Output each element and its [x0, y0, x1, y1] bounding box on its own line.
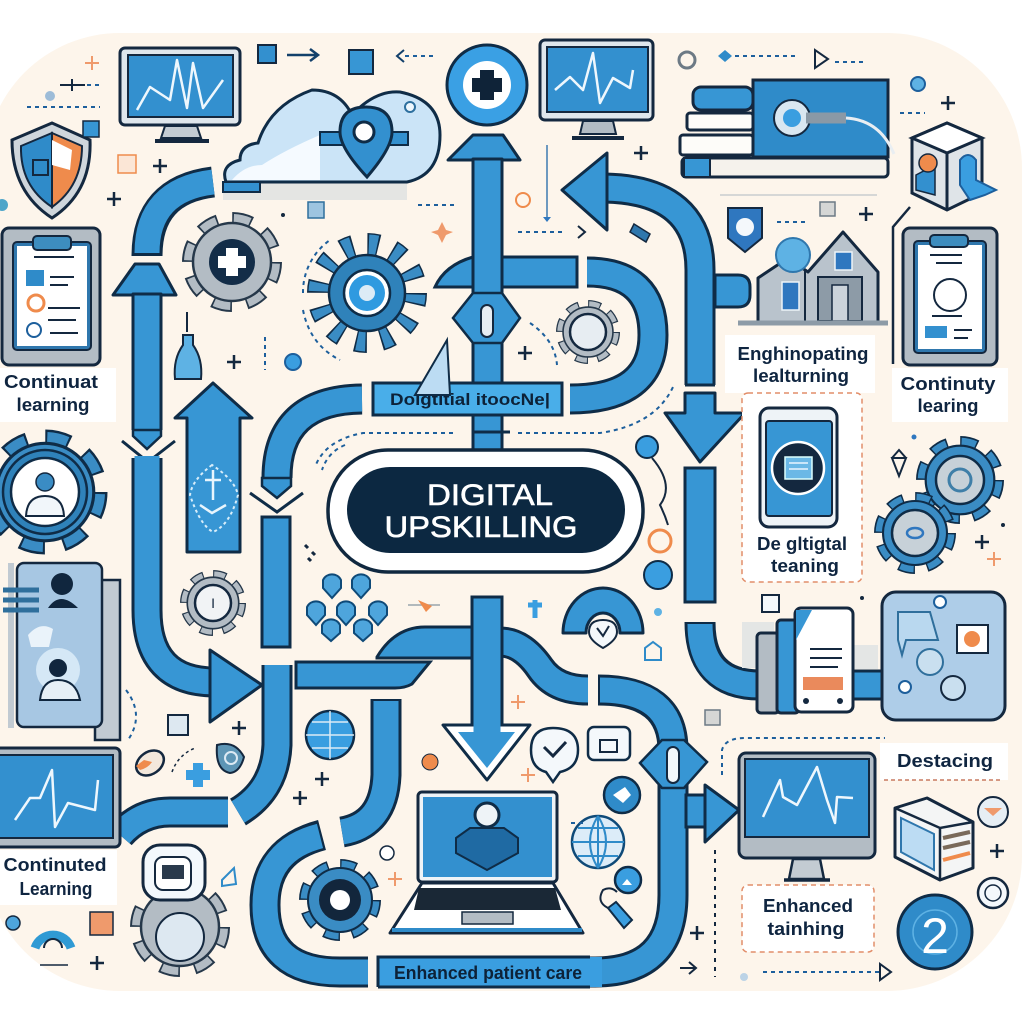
gear: left mid [187, 577, 239, 629]
route: band from bottom-left monitor [120, 812, 228, 835]
card: digital training phone [742, 393, 862, 582]
label: continuty learing [892, 368, 1008, 422]
icon: bottle [175, 312, 201, 379]
route: big bottom loop right [378, 690, 707, 972]
panel: map card [882, 592, 1005, 720]
icon: speech bubble check [531, 728, 578, 782]
icon: speech bubble case [588, 727, 630, 760]
central title pill: UPSKILLING [384, 511, 578, 544]
banner: enhanced patient care: Enhanced patient care [394, 963, 582, 983]
card: digital training phone: teaning [771, 556, 839, 576]
gear: left mid: I [211, 595, 215, 611]
icon: small bell [222, 868, 236, 886]
icon: number badge [898, 895, 972, 969]
icon: house [738, 232, 888, 323]
arrow routes [113, 135, 884, 972]
label: continuty learing: learing [918, 396, 978, 416]
gear: grey with plus [192, 222, 272, 302]
gear: centre blue spiky [320, 246, 414, 340]
icon: right side chain [636, 436, 672, 589]
icon: clipboard right [903, 228, 997, 365]
route: solid up arrow [175, 383, 252, 552]
icon: bottom-left arc [35, 935, 71, 948]
gear: bottom centre [307, 867, 373, 933]
label: enhanced training: Enhanced [763, 896, 853, 916]
card: people profile [3, 563, 120, 740]
gear: bottom left with badge [140, 845, 220, 967]
label: enghinopating lealturning [725, 335, 875, 393]
icon: mouse [600, 888, 632, 928]
icon: laptop [390, 792, 583, 933]
monitor: top left [120, 48, 240, 141]
label: continuted learning: Continuted [4, 855, 106, 875]
gear: far left with person [0, 442, 95, 542]
route: arrow into monitor [686, 785, 739, 842]
icon: cube [893, 123, 996, 364]
route: left long curve to right arrow [147, 456, 262, 722]
route: main vertical up arrow [448, 135, 520, 450]
label: destacing: Destacing [897, 751, 993, 771]
route: lower vertical curve [238, 665, 277, 812]
label: destacing [880, 743, 1008, 780]
icon: books and device [680, 80, 894, 177]
route: horizontal band left [296, 627, 473, 688]
card: digital training phone: De gltigtal [757, 534, 847, 554]
icon: half ring with tick pin [563, 588, 643, 648]
banner: enhanced patient care [378, 957, 602, 987]
label: continuat learning: learning [16, 395, 90, 415]
icon: crystal shard [415, 340, 450, 395]
route: right lower curve [700, 622, 884, 699]
icon: blue cross [186, 763, 210, 787]
gear: right lower [882, 500, 948, 566]
card: phone and document [742, 608, 878, 713]
icon: small blue blob [615, 867, 641, 893]
route: main vertical down arrow [443, 597, 530, 780]
label: enghinopating lealturning: lealturning [753, 366, 849, 386]
banner: digital touch [373, 383, 562, 415]
route: loop by centre right [570, 272, 653, 399]
label: continuted learning [0, 850, 117, 905]
icon: number badge: 2 [921, 908, 949, 964]
icon: small shield tag [728, 208, 762, 252]
route: big bottom loop left [265, 835, 368, 972]
gear: small centre right [562, 306, 614, 358]
banner: digital touch: Dolgtitial itoocNe| [390, 390, 550, 409]
route: top-left curve [147, 182, 213, 256]
route: drop to lower centre [342, 699, 386, 832]
small squares [83, 45, 835, 935]
icon: small pill [131, 745, 169, 781]
gear: right upper [925, 445, 995, 515]
label: enhanced training: tainhing [768, 919, 844, 939]
arrows and dashed lines [27, 49, 925, 980]
central title pill: DIGITAL [427, 479, 553, 512]
label: continuat learning [0, 368, 116, 422]
monitor: top centre [540, 40, 653, 138]
central title pill [328, 450, 643, 572]
icon: globe laptop side [572, 816, 624, 868]
icon: blue drop badge [217, 744, 244, 773]
icon: top plus badge [447, 45, 527, 125]
label: enhanced training [742, 885, 874, 952]
icon: shield [12, 123, 90, 218]
route: top horizontal band [435, 257, 577, 287]
label: continuty learing: Continuty [900, 374, 996, 394]
label: enghinopating lealturning: Enghinopating [738, 344, 868, 364]
route: right vertical bar [685, 468, 715, 602]
route: stub to house [715, 275, 750, 307]
route: top-right curve with arrow [562, 153, 715, 385]
route: horizontal band right [500, 642, 588, 690]
monitor: bottom right [739, 753, 875, 880]
icon: clipboard left [2, 228, 100, 365]
label: continuted learning: Learning [20, 879, 92, 899]
route: inner vertical bar [262, 517, 290, 647]
icon: cloud with location pin [223, 90, 440, 200]
route: left up arrow with chevron tail [113, 264, 176, 462]
monitor: bottom left [0, 748, 120, 847]
icon: globe lower [306, 711, 354, 759]
label: continuat learning: Continuat [4, 372, 98, 392]
icon: round badge [604, 777, 640, 813]
route: inner left curve with chevron [250, 399, 362, 512]
icon: pin cluster [307, 574, 387, 641]
route: right down arrow [665, 393, 745, 462]
icon: server box [895, 798, 973, 880]
